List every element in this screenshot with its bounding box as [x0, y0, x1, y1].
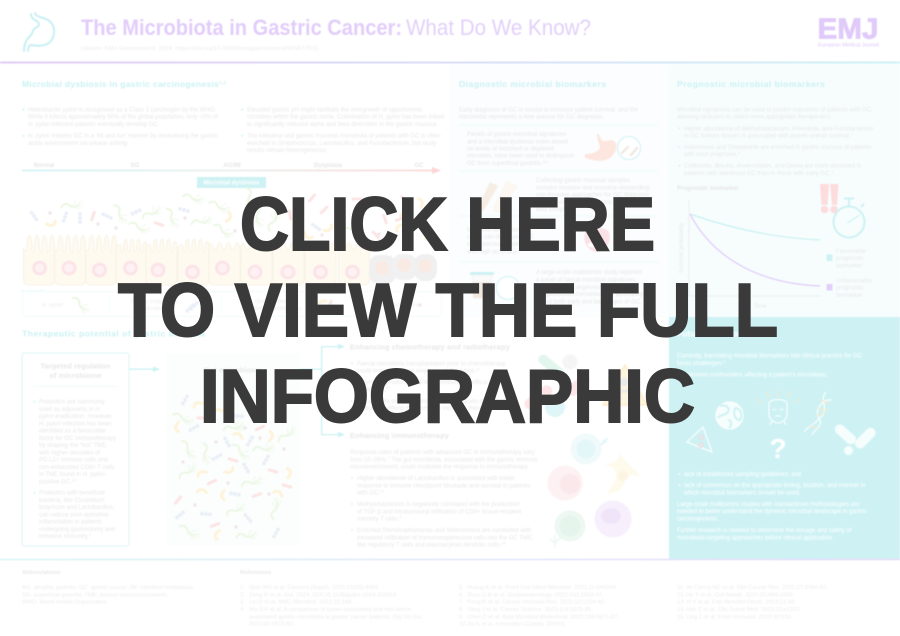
text block: prognostic bullets: allowing clinicians to select more appropriate therapeutics. — [677, 115, 832, 121]
text block: right bullets — [241, 108, 444, 154]
section: enhancing chemotherapy and radiotherapy: antitumour effects that enhance induction therapy. — [357, 406, 490, 412]
icon: exclamation marks — [820, 184, 838, 213]
text block: prognostic bullets: 7 — [851, 132, 854, 137]
text block: gastric signatures: and a microbial dysbiosis index based — [467, 139, 568, 145]
heading: prognostic: Prognostic microbial biomarkers — [677, 79, 825, 89]
illustration: cancer cells — [369, 254, 437, 284]
text block: future intro: Currently, translating microbial biomarkers into clinical practice for GC — [677, 354, 863, 360]
abbreviations: Abbreviations — [22, 570, 61, 576]
card: targeted regulation: factor for GC immunotherapy — [39, 436, 116, 442]
text block: non-invasive sampling: fluid samples. — [536, 207, 573, 213]
section: enhancing immunotherapy: increased infiltration of immunosuppressive cells into the GC TME, — [357, 535, 534, 541]
progression labels: Dysplasia — [314, 163, 343, 169]
section: enhancing immunotherapy: like regulatory T cells and plasmacytoid dendritic cells. — [357, 543, 501, 549]
progression labels: SG — [131, 163, 140, 169]
section: enhancing immunotherapy: 15 — [501, 541, 506, 546]
card: targeted regulation: Probiotics are commonly — [39, 400, 105, 406]
arrow: targeted regulation to gut microbiome — [129, 366, 160, 372]
section: enhancing immunotherapy: 7 — [399, 515, 402, 520]
text block: left bullets: H. pylori initiates GC in a ‘hit and run’ manner by neutralising the gastric — [28, 134, 218, 140]
text block: prognostic bullets: 8 — [738, 150, 741, 155]
abbreviations: AG: atrophic gastritis; GC: gastric cancer; IM: intestinal metaplasia; — [22, 585, 194, 591]
references: 1. — [240, 585, 245, 591]
section: enhancing immunotherapy: The gut microbiota, associated with the gastric immune — [390, 457, 538, 463]
icon: stool sample cup — [470, 272, 520, 300]
legend: Legend — [22, 290, 43, 296]
progression labels: GC — [414, 163, 424, 169]
text block: future intro — [677, 354, 863, 378]
legend: H. pylori — [42, 302, 63, 308]
citation: Citation: EMJ Gastroenterol. 2024; https://doi.org/10.33590/emjgastroenterol/WSET2915. — [81, 46, 320, 52]
references: Huang K et al. Front Cell Infect Microbiol. 2021;11:640309. — [467, 585, 618, 591]
text block: saliva biomarkers: with high accuracy. — [466, 250, 518, 256]
icon: DNA — [804, 392, 832, 435]
title — [81, 15, 591, 40]
overlay call to action: INFOGRAPHIC — [200, 354, 695, 438]
text block: future conclusions: lack of consensus on the appropriate timing, location, and manner in — [684, 483, 865, 489]
icon: hazard triangle — [603, 365, 647, 405]
text block: prognostic bullets: Collinsella, Blautia, Anaerostipes, and Dorea are more abundant in — [684, 164, 862, 170]
card: targeted regulation: PD-L1+ immune cells and — [39, 458, 108, 464]
text block: gastric signatures: GC from superficial gastritis. — [467, 161, 542, 167]
arrow: disease progression — [22, 167, 441, 174]
text block: faecal signatures: Streptococcus constellatus to accurately — [536, 292, 643, 298]
text block: future conclusions: Large-scale multicentre studies with standardised methodologies are — [677, 502, 860, 508]
legend — [22, 290, 442, 316]
legend: prognostic biomarker: biomarker — [836, 263, 863, 269]
icon: pills — [522, 353, 592, 417]
logo: EMJ: European Medical Journal — [818, 42, 879, 48]
text block: prognostic bullets: Higher abundance of Methylobacterium, Prevotella, and Fusobacterium — [684, 126, 873, 132]
text block: future intro: faces challenges: — [677, 361, 723, 367]
references: 9. — [459, 614, 464, 620]
text block: faecal signatures — [536, 270, 643, 305]
text block: right bullets: microbes within the gastric niche. Colonisation of H. pylori has been linked — [247, 115, 444, 121]
icon: stomach logo — [24, 13, 54, 51]
references: Chen C et al. Appl Microbiol Biotechnol. 2022;106:6671-87. — [467, 614, 619, 620]
heading: therapeutic: Therapeutic potential of gastric bacteria — [22, 328, 205, 338]
chart: survival curves: Prognostic biomarker — [677, 186, 740, 192]
chart: survival curves: Time — [753, 304, 767, 310]
section: enhancing chemotherapy and radiotherapy: Gut bacteria producing short-chain fatty acids display — [357, 399, 498, 405]
text block: prognostic bullets — [677, 108, 873, 177]
illustration: microbes above epithelium — [29, 187, 434, 245]
card: targeted regulation: non-exhausted CD8+ T cells — [39, 465, 115, 471]
header rule — [0, 62, 900, 64]
section: enhancing immunotherapy: response to immune checkpoint blockade and survival in patients — [357, 483, 530, 489]
text block: prognostic bullets: 9 — [831, 169, 834, 174]
icon: question mark: ? — [769, 433, 787, 464]
card: targeted regulation: with higher densities of — [38, 450, 100, 456]
card: targeted regulation: of microbiome — [49, 371, 102, 380]
panel: gut microbiome: Gut microbiome — [204, 366, 262, 374]
legend: Oral/intestinal — [255, 299, 290, 305]
panel: diagnostic background — [450, 64, 669, 317]
references: Peng R et al. Cancer Immunol Res. 2022;10:1224-40. — [467, 600, 606, 606]
text block: non-invasive sampling: non-invasive approaches for GC diagnosis — [536, 192, 649, 198]
section: enhancing chemotherapy and radiotherapy: Faecal microbiota transplantation prior to chemotherapy — [357, 361, 505, 367]
references: Wu Z-F et al. A comparison of tumor-associated and non-tumor- — [249, 607, 413, 613]
section: enhancing immunotherapy: Response rates of patients with advanced GC to immunotherapy vary — [350, 450, 535, 456]
abbreviations: SG: superficial gastritis; TME: tumour microenvironment; — [22, 592, 168, 598]
icon: stopwatch — [834, 198, 864, 238]
card: targeted regulation: used as adjuvants in H. — [39, 407, 101, 413]
progression labels: Normal — [34, 163, 55, 169]
references: Han Z et al. Clin Transl Med. 2023;13:e1312. — [686, 607, 802, 613]
heading: dysbiosis: 1,2 — [219, 80, 226, 85]
text block: saliva biomarkers: saliva can distinguish GC — [467, 234, 535, 240]
text block: future intro: unknown confounders affecting a patient’s microbiota; — [684, 372, 827, 378]
text block: gastric signatures: microbes, have been used to distinguish — [467, 154, 574, 160]
references: 2. — [240, 592, 245, 598]
references: 2021;66:1673-82. — [249, 622, 295, 628]
icon: immune cells — [548, 434, 640, 547]
section: enhancing immunotherapy: Methylobacterium is negatively correlated with the production — [357, 502, 519, 508]
section: enhancing chemotherapy and radiotherapy: oxaliplatin. — [357, 387, 385, 393]
text block: left bullets: While it infects approximately 50% of the global population, only <3% of — [28, 115, 218, 121]
section: enhancing immunotherapy: Higher abundance of Lactobacillus is associated with better — [357, 476, 515, 482]
text block: gastric signatures: Panels of gastric microbial signatures — [467, 132, 566, 138]
section: enhancing immunotherapy: from 10–26%. — [350, 457, 387, 463]
text block: gastric signatures: on levels of enriched or depleted — [467, 146, 554, 152]
card: targeted regulation: 2 — [89, 532, 92, 537]
section: enhancing chemotherapy and radiotherapy — [350, 342, 511, 412]
legend: prognostic biomarker — [826, 249, 872, 299]
icon: head with stress marks — [757, 390, 799, 425]
legend: prognostic biomarker: prognostic — [836, 256, 864, 262]
footer rule — [0, 559, 900, 560]
references: Ling Z et al. Front Immunol. 2019;10:533. — [686, 614, 793, 620]
illustration: gastric epithelium cells — [24, 236, 370, 285]
text block: future conclusions: which microbial biomarkers should be used. — [683, 490, 801, 496]
text block: right bullets: to significantly reduced alpha and beta diversities in the gastric mucosa. — [247, 122, 438, 128]
references: 10. — [459, 622, 467, 628]
text block: left bullets — [22, 108, 218, 147]
icon: saliva mouth — [584, 228, 610, 252]
references: Liu D et al. BMC Microbiol. 2022;22:184. — [249, 600, 353, 606]
text block: right bullets: The intestinal and gastric mucosal microbiota of patients with GC is often — [247, 134, 440, 140]
section: enhancing immunotherapy: Enriched Stenotrophomonas and Selenomona are correlated with — [357, 528, 531, 534]
card: targeted regulation: can reduce post-operative — [39, 512, 109, 518]
references: associated gastric microbiota in gastric cancer patients. Dig Dis Sci. — [249, 614, 423, 620]
text block: prognostic bullets: Microbial signatures can be used to predict outcomes of patients with GC, — [677, 108, 873, 114]
references: He Y et al. Cell Metab. 2021;33:988-1000. — [686, 592, 794, 598]
arrow: branching to chemotherapy and immunotherapy — [300, 344, 345, 437]
heading: dysbiosis: Microbial dysbiosis in gastric carcinogenesis — [22, 79, 219, 89]
section: enhancing immunotherapy: Enhancing immunotherapy — [350, 431, 450, 440]
text block: prognostic bullets: Halomonas and Shewanella are enriched in gastric mucosa of patients — [684, 145, 871, 151]
card: targeted regulation: 10 — [72, 478, 77, 482]
progression labels — [34, 163, 424, 169]
text block: right bullets: Elevated gastric pH might facilitate the overgrowth of opportunistic — [247, 108, 423, 114]
references: 6. — [459, 592, 464, 598]
section: enhancing chemotherapy and radiotherapy: could improve patient response and survival. — [357, 368, 476, 374]
panel: microbial dysbiosis — [22, 79, 444, 316]
text block: faecal signatures: A large-scale multicentre study reported — [536, 270, 642, 276]
legend: opportunistic pathogens — [240, 306, 302, 312]
text block: faecal signatures: a panel of faecal microbial signatures — [536, 277, 635, 283]
card: targeted regulation: in TME found in H. pylori- — [39, 472, 107, 478]
section: enhancing chemotherapy and radiotherapy: Polymyxin-producing bacteria increase the efficacy of — [357, 380, 499, 386]
panel: prognostic biomarkers — [677, 79, 873, 310]
references: 5. — [459, 585, 464, 591]
panel: gut microbiome — [166, 353, 300, 545]
text block: saliva biomarkers: Microbial biomarkers in — [467, 227, 529, 233]
panel: therapeutic potential — [22, 328, 647, 549]
legend: prognostic biomarker: biomarker — [836, 293, 863, 299]
abbreviations — [22, 570, 194, 606]
legend: Gastric indigenous — [130, 299, 178, 305]
text block: future conclusions: needed to better understand the dynamic microbial landscape in gastric — [677, 509, 867, 515]
section: enhancing immunotherapy — [350, 431, 538, 549]
text block: right bullets: enriched in Streptococcus, Lactobacillus, and Fusobacterium, but study — [247, 141, 436, 147]
section: enhancing chemotherapy and radiotherapy: 11 — [476, 366, 481, 372]
text block: prognostic bullets: with poor prognosis. — [684, 152, 738, 158]
references: Yi Y et al. Exp Hematol Oncol. 2023;12:48. — [686, 600, 796, 606]
legend: prognostic biomarker: prognostic — [836, 286, 864, 292]
chart: survival curves: Survival probability — [679, 223, 685, 273]
overlay call to action: CLICK HERE — [240, 182, 655, 266]
text block: non-invasive sampling: can use circulating or gastric — [536, 200, 612, 206]
section: enhancing immunotherapy: with GC. — [357, 491, 380, 497]
references: 7. — [459, 600, 464, 606]
text block: right bullets: results remain heterogeneous. — [247, 148, 328, 154]
card: targeted regulation: pylori eradication. However, — [38, 414, 113, 420]
references: Jia K et al. Innovation (Camb). 2024;5. — [467, 622, 566, 628]
text block: left bullets: Helicobacter pylori is recognised as a Class 1 carcinogen by the WHO. — [28, 108, 216, 114]
section: enhancing immunotherapy: microenvironment, could modulate the response to immunotherapy. — [350, 464, 529, 470]
references: Yang J et al. Cancer Science. 2023;114:1075-85. — [467, 607, 593, 613]
text block: faecal signatures: Streptococcus anginosus and — [536, 285, 615, 291]
legend: prognostic biomarker: Favourable — [836, 249, 867, 255]
card: targeted regulation: positive GC. — [39, 480, 72, 486]
icon: stomach with magnifier — [585, 134, 640, 161]
panel: prognostic background — [669, 64, 900, 317]
section: enhancing immunotherapy: memory T cells. — [357, 517, 399, 523]
text block: saliva biomarkers — [466, 227, 539, 256]
card: targeted regulation: enhance immunity. — [39, 534, 89, 540]
abbreviations: WHO: World Health Organization — [22, 600, 107, 606]
card: targeted regulation: by shaping the “hot” TME, — [39, 443, 108, 449]
panel: future directions — [677, 328, 878, 542]
references: 14. — [677, 607, 685, 613]
card: targeted regulation: H. pylori infection has been — [39, 422, 111, 428]
section: enhancing immunotherapy: 7 — [387, 455, 390, 460]
icon: pizza slice — [687, 427, 712, 452]
text block: future intro: 2 — [723, 359, 726, 364]
references: 3. — [240, 600, 245, 606]
text block: prognostic bullets: patients with advanced GC than in those with early GC. — [684, 171, 831, 177]
card: targeted regulation: undergoing gastrectomy and — [39, 527, 115, 533]
title: What Do We Know? — [406, 15, 591, 40]
text block: diagnostic intro: Early diagnosis of GC is crucial to increase patient survival, and the — [459, 108, 639, 114]
text block: gastric signatures: 3,4 — [542, 159, 549, 164]
card: targeted regulation — [22, 353, 129, 546]
card: targeted regulation: bacteria, like Clostridium — [39, 498, 104, 504]
progression labels: AG/IM — [223, 163, 241, 169]
legend: prognostic biomarker: Unfavourable — [836, 278, 872, 284]
text block: non-invasive sampling: remains invasive and resource-demanding; — [536, 185, 651, 191]
text block: left bullets: acidic environment via urease activity. — [28, 141, 129, 147]
text block: gastric signatures — [467, 132, 574, 167]
text block: future conclusions: Further research is needed to determine the dosage and safety of — [677, 528, 852, 534]
icon: test tubes — [479, 181, 517, 212]
text block: future conclusions: carcinogenesis. — [677, 516, 719, 522]
text block: saliva biomarkers: from non-malignant lesions — [467, 242, 539, 248]
text block: future conclusions: lack of established sampling guidelines; and — [684, 472, 801, 478]
references: Shin WS et al. Cancers (Basel). 2023;15(20):4993. — [249, 585, 380, 591]
legend: microbes — [142, 306, 166, 312]
card: targeted regulation: inflammation in patients — [39, 520, 102, 526]
references — [240, 570, 828, 628]
section: enhancing chemotherapy and radiotherapy: 12 — [385, 385, 391, 390]
card: targeted regulation: identified as a favourable — [39, 429, 106, 435]
section: enhancing immunotherapy: 14 — [380, 489, 385, 494]
logo: EMJ: EMJ — [818, 14, 878, 46]
text block: diagnostic intro — [459, 108, 639, 121]
panel: diagnostic biomarkers — [459, 79, 658, 305]
references: de Clercq NC et al. Clin Cancer Res. 2021;27:3784-92. — [686, 585, 828, 591]
icon: pills white — [833, 422, 878, 455]
section: enhancing chemotherapy and radiotherapy: Enhancing chemotherapy and radiotherapy — [350, 342, 511, 352]
text block: prognostic bullets: in GC tumour tissues is associated with poorer overall survival. — [684, 134, 851, 140]
icon: globe — [716, 402, 743, 429]
card: targeted regulation: butyricum and Lactobacillus, — [39, 505, 115, 511]
references: References — [240, 570, 271, 576]
overlay call to action: TO VIEW THE FULL — [118, 268, 778, 352]
label: microbial dysbiosis — [197, 177, 266, 188]
card: targeted regulation: Probiotics with beneficial — [39, 491, 105, 497]
title: The Microbiota in Gastric Cancer: — [81, 15, 402, 40]
text block: left bullets: H. pylori-infected patients eventually develop GC. — [28, 122, 160, 128]
text block: faecal signatures: detect both early and late stages of GC. — [536, 299, 642, 305]
references: 4. — [240, 607, 245, 613]
card: targeted regulation: Targeted regulation — [40, 362, 111, 370]
text block: non-invasive sampling: Collecting gastric mucosal samples — [536, 178, 630, 184]
legend: Nitrate producers — [374, 302, 419, 308]
text block: future conclusions — [677, 472, 867, 542]
text block: non-invasive sampling — [536, 178, 651, 213]
heading: diagnostic: Diagnostic microbial biomarkers — [459, 79, 606, 89]
chart: survival curves — [677, 186, 821, 310]
references: 8. — [459, 607, 464, 613]
overlay call to action — [118, 182, 778, 438]
references: Zeng R et al. Gut. 2024; DOI:10.1136/gutjnl-2024-332815. — [249, 592, 398, 598]
text block: future conclusions: microbiota-targeting approaches before clinical application. — [677, 536, 834, 542]
references: 11. — [677, 585, 685, 591]
references: 15. — [677, 614, 685, 620]
references: Zhou C-B et al. Gastroenterology. 2022;162:1933-47. — [467, 592, 604, 598]
label: microbial dysbiosis: Microbial dysbiosis — [204, 181, 260, 187]
panel: future directions background — [669, 317, 900, 559]
text block: diagnostic intro: microbiota represents a new avenue for GC diagnosis. — [459, 115, 604, 121]
heading: future: Future directions — [677, 328, 747, 338]
references: 13. — [677, 600, 685, 606]
references: 12. — [677, 592, 685, 598]
section: enhancing immunotherapy: of TGF-β and intratumoural infiltration of CD8+ tissue-resident — [357, 509, 522, 515]
